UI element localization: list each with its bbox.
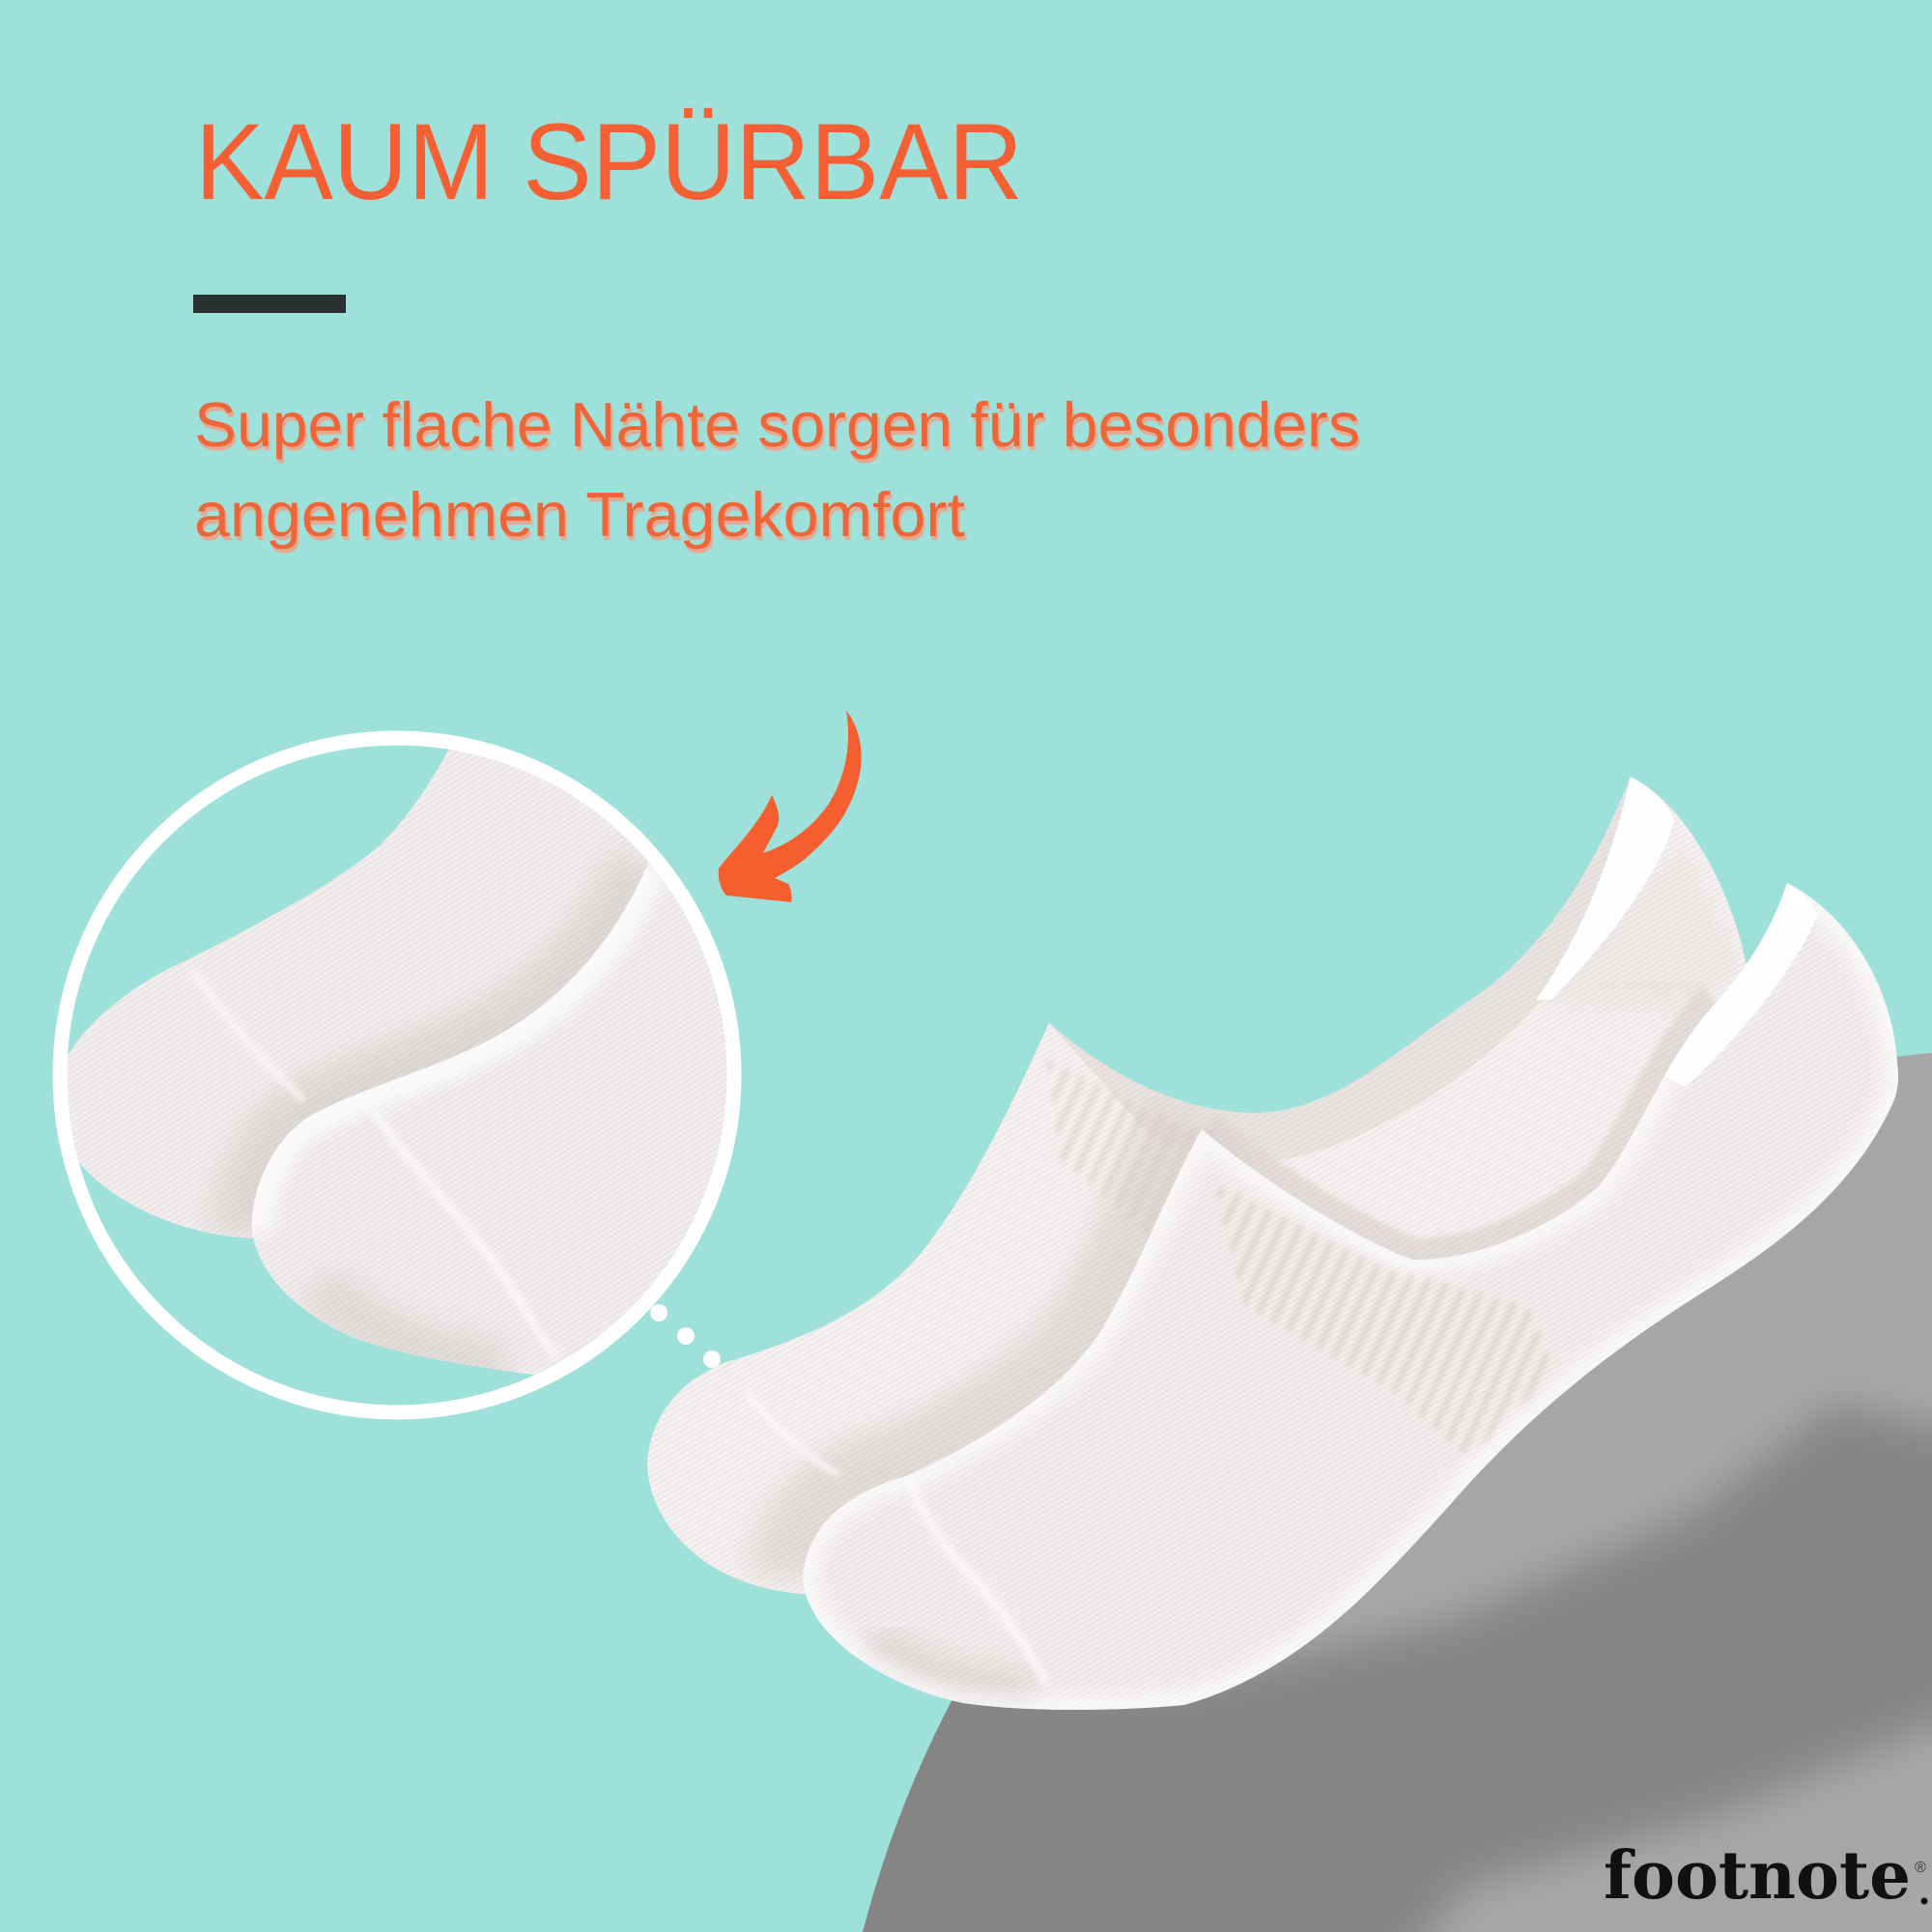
subheading text: angenehmen Tragekomfort: [194, 479, 965, 550]
rear sock: [638, 773, 1758, 1604]
arrow pointing to zoom circle: [719, 711, 862, 902]
front sock ribbing: [1213, 1182, 1555, 1459]
rear sock heel rim: [1536, 777, 1674, 1000]
connector dots: [650, 1304, 721, 1368]
subheading text: Super flache Nähte sorgen für besonders: [194, 389, 1360, 460]
magnified rear sock: [68, 750, 649, 1238]
magnified front sock: [251, 862, 726, 1376]
rear sock inner lining: [1049, 777, 1631, 1161]
brand logo: ®: [1915, 1860, 1926, 1876]
front sock heel rim: [1653, 883, 1818, 1087]
subheading text: [194, 389, 1360, 550]
magnified detail circle: [52, 730, 742, 1420]
title: KAUM SPÜRBAR: [195, 101, 1023, 222]
product photo: pair of white socks: [638, 773, 1913, 1719]
brand logo: footnote: [1604, 1837, 1911, 1915]
divider bar: [193, 295, 346, 313]
front sock: [792, 869, 1913, 1719]
grey surface with shadow: [863, 1053, 1932, 1932]
